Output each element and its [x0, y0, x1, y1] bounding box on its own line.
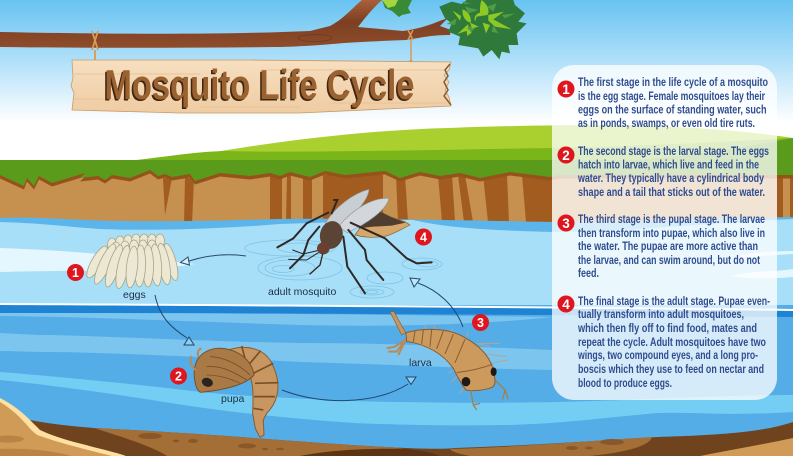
river upper band: [0, 217, 793, 312]
icon: larva: [387, 312, 508, 410]
stage 4 text: [558, 296, 770, 390]
badge 1 on diagram: [67, 264, 84, 281]
badge 3 on diagram: 3: [477, 316, 484, 330]
rope right: [405, 30, 416, 67]
water ripples: [245, 240, 442, 298]
muddy bank: [0, 398, 793, 456]
stage 4 text: tually transform into adult mosquitoes,: [578, 309, 744, 321]
rope left: [89, 31, 101, 67]
stage 3 text: [558, 214, 765, 280]
stage 1 text: 1: [562, 82, 570, 97]
stage 1 text: [558, 77, 768, 130]
badge 3 on diagram: [472, 314, 489, 331]
panel: stage descriptions: [552, 65, 777, 400]
river lower band: [0, 303, 793, 456]
badge 2 on diagram: [170, 368, 187, 384]
stage 4 text: blood to produce eggs.: [578, 378, 672, 390]
label: pupa: pupa: [221, 393, 245, 405]
stage 3 text: feed.: [578, 268, 599, 280]
badge 4 on diagram: [415, 228, 432, 246]
arrow: pupa to larva: [282, 377, 416, 401]
riverbank soil: [0, 160, 793, 225]
label: eggs: eggs: [123, 289, 146, 301]
sign board: [71, 60, 451, 113]
tree branch: [0, 0, 451, 48]
label: larva: larva: [409, 357, 432, 369]
leaf cluster small: [382, 0, 412, 17]
stage 4 text: 4: [562, 297, 570, 312]
arrow: adult to eggs: [180, 255, 246, 265]
leaf cluster large: [439, 0, 527, 59]
badge 2 on diagram: 2: [175, 370, 182, 384]
label: adult mosquito: adult mosquito: [268, 286, 336, 298]
arrow: larva to adult: [410, 278, 463, 327]
stage 2 text: 2: [562, 148, 570, 163]
title: Mosquito Life Cycle: [104, 61, 414, 108]
stage 3 text: 3: [562, 216, 570, 231]
arrow: eggs to pupa: [155, 295, 194, 345]
grassy hills: [0, 125, 793, 190]
title: Mosquito Life Cycle: [103, 62, 413, 110]
icon: pupa: [190, 346, 278, 437]
badge 1 on diagram: 1: [72, 266, 79, 280]
icon: eggs: [83, 234, 181, 290]
badge 4 on diagram: 4: [420, 230, 427, 244]
sky background: [0, 0, 793, 122]
stage 2 text: [558, 146, 769, 199]
icon: adult mosquito: [277, 189, 432, 293]
